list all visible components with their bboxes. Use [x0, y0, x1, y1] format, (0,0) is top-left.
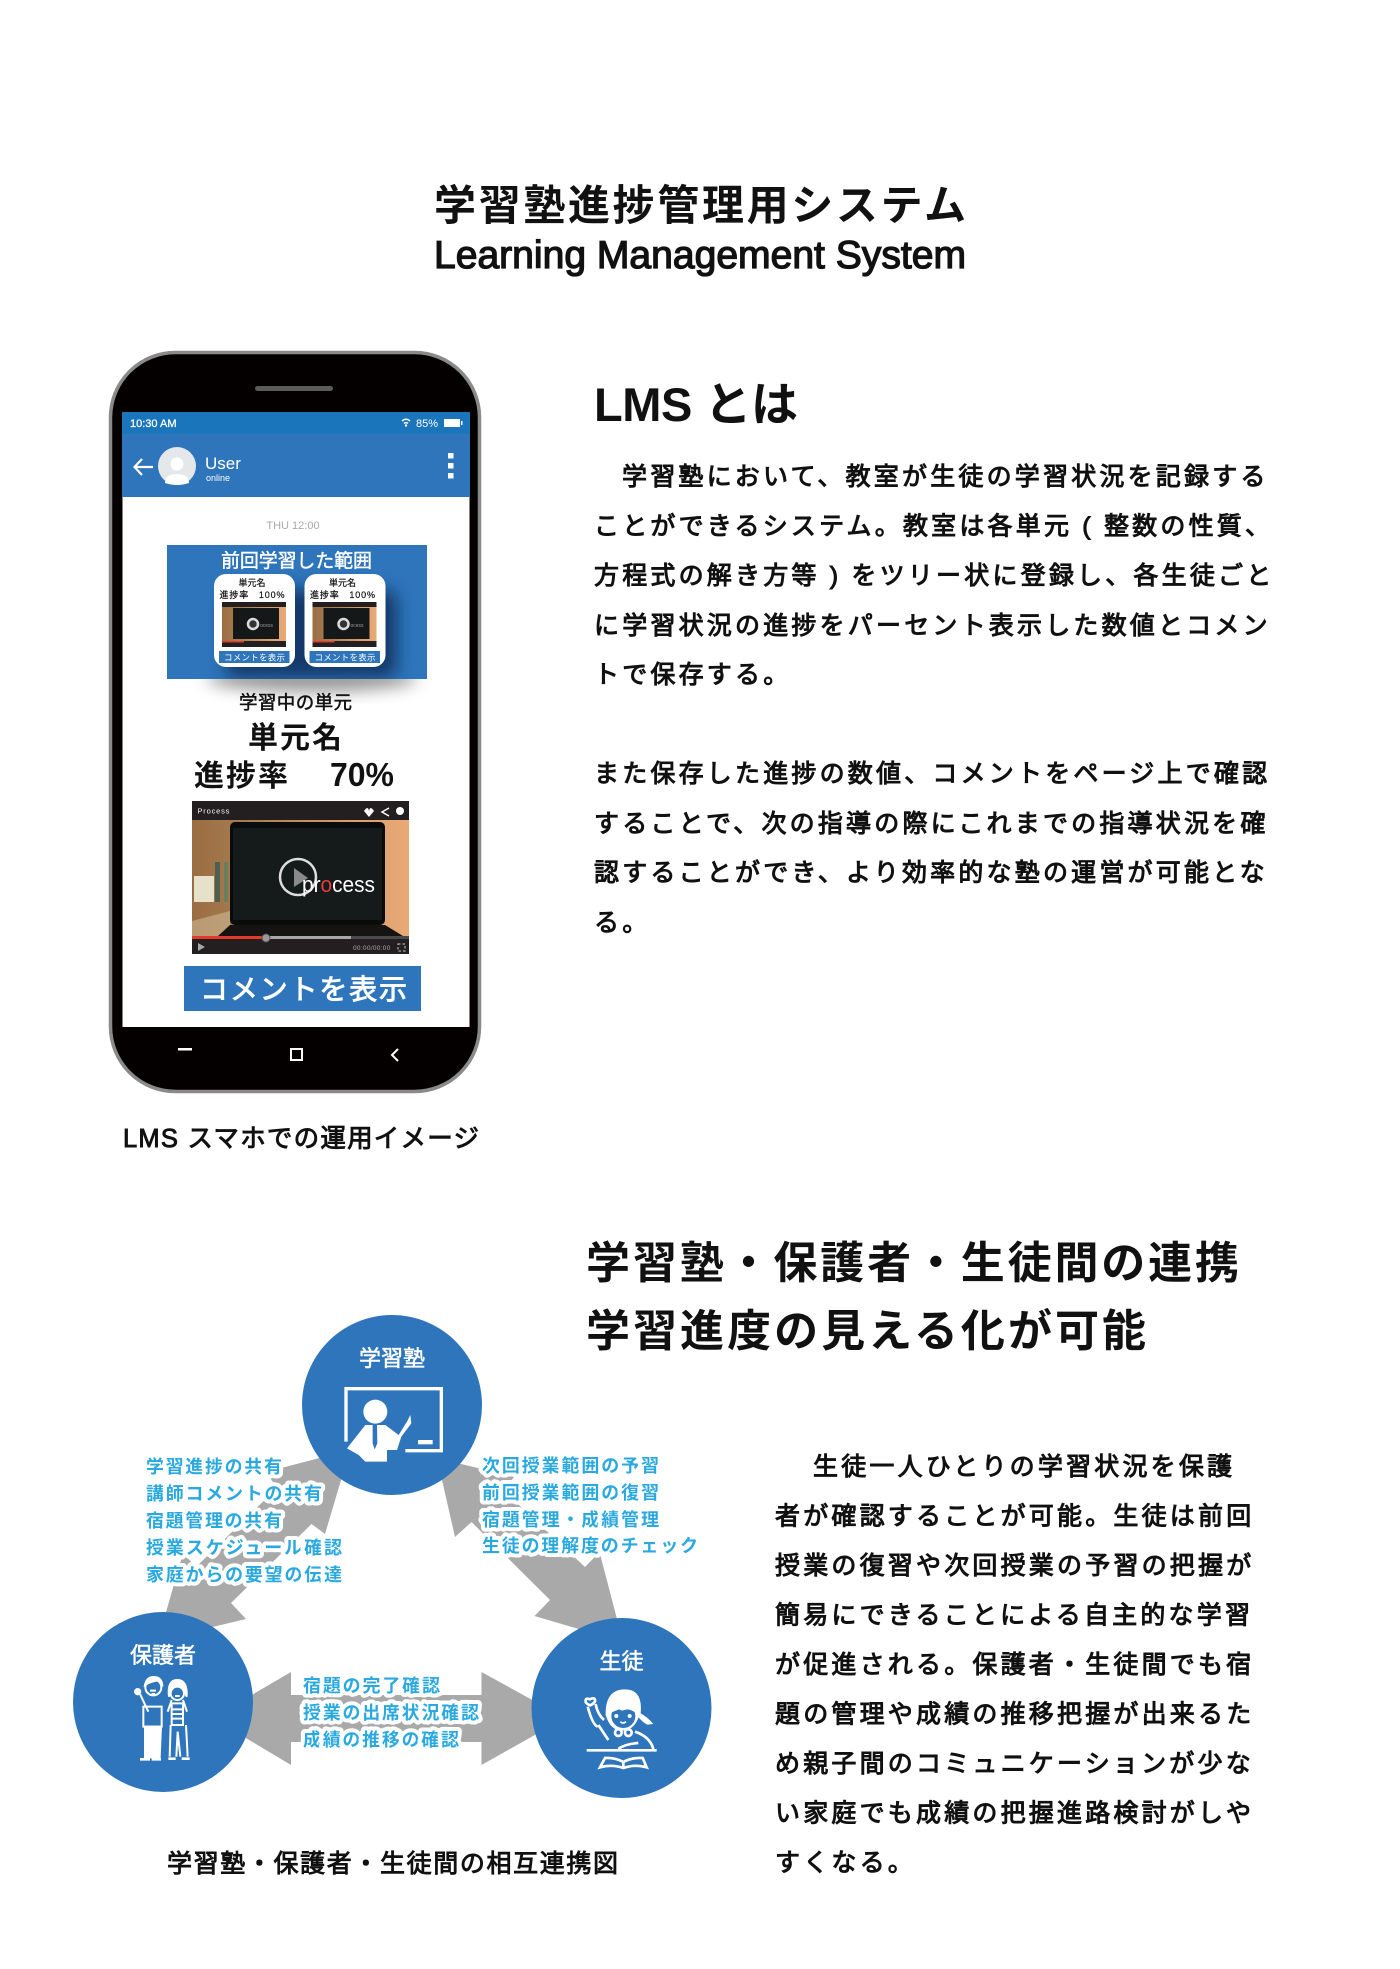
labels: school and student	[482, 1455, 698, 1556]
card 1: コメントを表示	[224, 652, 285, 662]
panel: previous lessons	[167, 545, 427, 679]
arrow: school to parents	[158, 1450, 350, 1640]
status bar	[122, 412, 470, 434]
circle: parents: 保護者	[130, 1643, 196, 1668]
card 2: コメントを表示	[314, 652, 376, 662]
video player: 00:00/00:00	[353, 945, 391, 952]
text block: cooperation description: 生徒一人ひとりの学習状況を保護	[813, 1453, 1235, 1481]
circle: school: 学習塾	[359, 1346, 425, 1371]
circle: student	[532, 1618, 712, 1798]
title	[434, 182, 966, 277]
text block: cooperation description: い家庭でも成績の把握進路検討がしや	[775, 1800, 1254, 1828]
card 1: ocess	[260, 623, 274, 629]
labels: school and parents: 授業スケジュール確認	[146, 1538, 342, 1558]
labels: school and student: 前回授業範囲の復習	[482, 1482, 659, 1503]
text block: cooperation description: 授業の復習や次回授業の予習の把握が	[775, 1552, 1254, 1580]
text block: LMS description: 方程式の解き方等 ) をツリー状に登録し、各生徒ごと	[594, 562, 1274, 590]
status bar: 85%	[416, 418, 438, 430]
current unit text: 単元名	[248, 722, 342, 755]
heading: LMS: LMS とは	[594, 378, 798, 431]
labels: school and parents: 講師コメントの共有	[146, 1484, 322, 1504]
panel shadow	[207, 664, 417, 692]
text block: LMS description: に学習状況の進捗をパーセント表示した数値とコメン	[594, 612, 1271, 640]
labels: parents and student: 宿題の完了確認	[303, 1676, 440, 1696]
screen: THU 12:00	[266, 520, 320, 532]
circle: student: 生徒	[600, 1649, 644, 1674]
labels: parents and student: 成績の推移の確認	[303, 1729, 459, 1750]
card 1: 進捗率 100%	[220, 589, 284, 600]
text block: LMS description: トで保存する。	[594, 661, 791, 689]
current unit text: 70%	[330, 756, 394, 793]
panel: previous lessons: 前回学習した範囲	[221, 550, 372, 572]
card 2	[304, 574, 386, 667]
text block: LMS description: る。	[594, 909, 650, 937]
text block: cooperation description: 題の管理や成績の推移把握が出来るた	[775, 1700, 1254, 1728]
card 2: ocess	[350, 623, 364, 629]
diagram: three-party cooperation	[73, 1315, 712, 1798]
phone caption: LMS スマホでの運用イメージ	[123, 1125, 479, 1153]
labels: school and parents: 家庭からの要望の伝達	[146, 1565, 342, 1585]
labels: school and parents: 学習進捗の共有	[146, 1456, 282, 1477]
text block: cooperation description: 簡易にできることによる自主的な学習	[775, 1602, 1253, 1630]
labels: parents and student	[303, 1676, 479, 1750]
icon: parents	[135, 1677, 190, 1759]
text block: LMS description: することで、次の指導の際にこれまでの指導状況を確	[594, 810, 1269, 838]
text block: LMS description: また保存した進捗の数値、コメントをページ上で確認	[594, 760, 1270, 788]
app header: User	[205, 454, 241, 473]
current unit text: 進捗率	[194, 760, 288, 793]
labels: school and parents: 宿題管理の共有	[146, 1510, 282, 1531]
video player: Process	[198, 806, 230, 816]
text block: LMS description: ことができるシステム。教室は各単元 ( 整数の性質、	[594, 512, 1273, 540]
screen	[122, 497, 470, 1027]
arrow: parents to student	[212, 1672, 565, 1765]
current unit text	[194, 692, 394, 793]
text block: cooperation description: すくなる。	[775, 1849, 916, 1877]
current unit text: 学習中の単元	[239, 692, 352, 713]
arrow: school to student	[437, 1458, 623, 1642]
card 2: 進捗率 100%	[310, 589, 375, 600]
heading: cooperation: 学習進度の見える化が可能	[586, 1307, 1146, 1356]
text block: cooperation description: 者が確認することが可能。生徒は前回	[775, 1502, 1254, 1530]
labels: school and student: 宿題管理・成績管理	[482, 1509, 659, 1530]
text block: LMS description	[594, 463, 1274, 937]
text block: LMS description: 学習塾において、教室が生徒の学習状況を記録する	[622, 463, 1269, 491]
labels: school and student: 次回授業範囲の予習	[482, 1455, 659, 1476]
text block: cooperation description: め親子間のコミュニケーションが少な	[775, 1750, 1254, 1778]
phone mockup	[110, 352, 480, 1092]
nav bar	[178, 1048, 398, 1061]
circle: school	[302, 1315, 482, 1495]
card 1	[214, 574, 295, 667]
text block: cooperation description	[775, 1453, 1254, 1877]
labels: parents and student: 授業の出席状況確認	[303, 1703, 479, 1723]
labels: school and parents	[146, 1456, 342, 1585]
card 2: 単元名	[329, 577, 356, 588]
title: 学習塾進捗管理用システム	[434, 182, 966, 229]
video player: process	[302, 872, 375, 897]
heading: cooperation: 学習塾・保護者・生徒間の連携	[586, 1239, 1239, 1288]
circle: parents	[73, 1612, 253, 1792]
app header	[122, 434, 470, 497]
app header: online	[206, 473, 230, 483]
icon: student	[586, 1689, 657, 1768]
text block: cooperation description: が促進される。保護者・生徒間でも宿	[775, 1651, 1254, 1679]
comment button: コメントを表示	[200, 974, 407, 1005]
card 1: 単元名	[238, 577, 266, 588]
status bar: 10:30 AM	[130, 418, 176, 430]
heading: cooperation	[586, 1239, 1239, 1356]
comment button	[184, 966, 421, 1011]
diagram caption: 学習塾・保護者・生徒間の相互連携図	[167, 1850, 618, 1878]
text block: LMS description: 認することができ、より効率的な塾の運営が可能とな	[594, 859, 1268, 887]
icon: teacher	[346, 1389, 441, 1462]
video player	[192, 801, 409, 954]
labels: school and student: 生徒の理解度のチェック	[482, 1536, 698, 1556]
title: Learning Management System	[434, 234, 966, 277]
